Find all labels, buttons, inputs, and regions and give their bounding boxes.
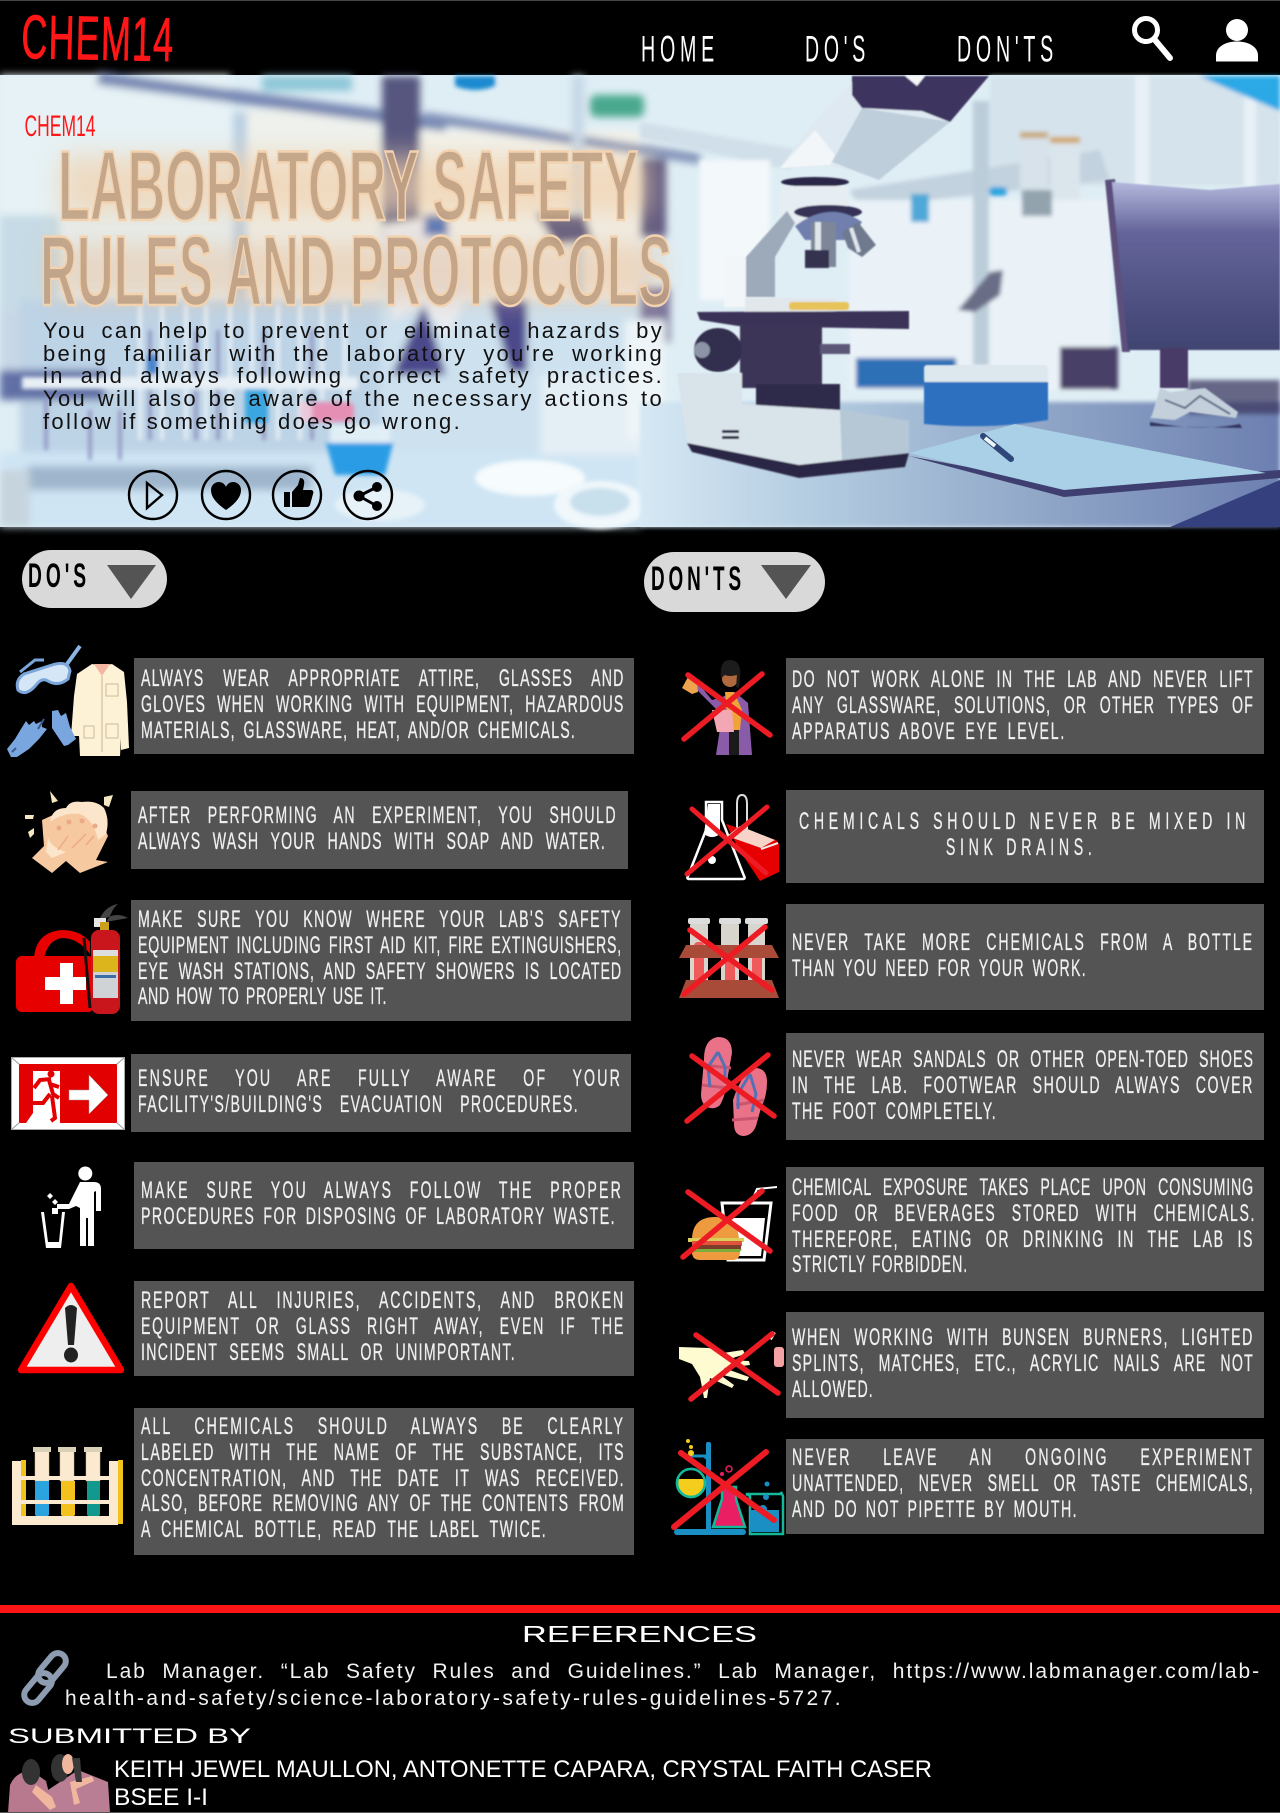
icon: user — [1216, 19, 1258, 62]
hero small brand label: CHEM14 — [24, 110, 96, 143]
text block: APPARATUS ABOVE EYE LEVEL. — [792, 718, 1066, 745]
text block: THEREFORE, EATING OR DRINKING IN THE LAB IS — [792, 1226, 1254, 1253]
submitter names — [114, 1757, 934, 1811]
text block: MAKE SURE YOU KNOW WHERE YOUR LAB'S SAFETY — [138, 906, 622, 933]
panel: do 3 — [131, 900, 631, 1021]
text block — [140, 1413, 625, 1543]
red cross — [684, 674, 770, 739]
text block: EYE WASH STATIONS, AND SAFETY SHOWERS IS LOCATED — [138, 958, 622, 985]
text block — [138, 802, 617, 855]
text block — [792, 1444, 1254, 1523]
panel: do 2 — [131, 791, 628, 869]
text block: SPLINTS, MATCHES, ETC., ACRYLIC NAILS ARE NOT — [792, 1350, 1254, 1377]
icon: thumbs up — [273, 471, 321, 519]
text block: NEVER LEAVE AN ONGOING EXPERIMENT — [792, 1444, 1254, 1471]
text block: AND DO NOT PIPETTE BY MOUTH. — [792, 1496, 1078, 1523]
navigation — [641, 28, 1058, 70]
dropdown: do's — [22, 550, 167, 608]
panel: don't 6 — [786, 1312, 1264, 1418]
reference text — [65, 1660, 1261, 1710]
icon: science glassware crossed out — [671, 1439, 784, 1536]
navigation: DO'S — [805, 28, 870, 70]
text block: LABELED WITH THE NAME OF THE SUBSTANCE, ITS — [141, 1439, 625, 1466]
icon: students group — [8, 1753, 110, 1813]
icon: flask and box crossed out — [684, 794, 779, 881]
text block — [792, 666, 1254, 745]
panel: don't 3 — [786, 904, 1264, 1010]
intro paragraph: in and always following correct safety practices. — [43, 363, 664, 388]
hero photo: laboratory with microscope — [0, 66, 1280, 534]
text block — [141, 1287, 625, 1366]
text block: DO NOT WORK ALONE IN THE LAB AND NEVER LIFT — [792, 666, 1254, 693]
text block: CHEMICALS SHOULD NEVER BE MIXED IN — [799, 808, 1250, 835]
icon: play — [129, 471, 177, 519]
hero title with glow — [40, 130, 672, 326]
icon: first aid kit and fire extinguisher — [16, 904, 128, 1014]
text block — [141, 1177, 623, 1230]
text block: EQUIPMENT INCLUDING FIRST AID KIT, FIRE EXTINGUISHERS, — [138, 932, 622, 959]
panel: do 7 — [134, 1408, 634, 1555]
panel: don't 7 — [786, 1439, 1264, 1534]
text block: ALLOWED. — [792, 1376, 874, 1403]
text block: MAKE SURE YOU ALWAYS FOLLOW THE PROPER — [141, 1177, 623, 1204]
dropdown: do's: DO'S — [28, 557, 90, 595]
submitted by heading: SUBMITTED BY — [8, 1725, 251, 1748]
text block: IN THE LAB. FOOTWEAR SHOULD ALWAYS COVER — [792, 1072, 1254, 1099]
hero action icons — [128, 470, 394, 520]
icon: link — [21, 1650, 69, 1706]
text block: FACILITY'S/BUILDING'S EVACUATION PROCEDURES. — [138, 1091, 578, 1118]
icon: washing hands — [25, 791, 113, 873]
icon: test tubes crossed out — [679, 918, 779, 998]
goggles on table — [1150, 388, 1242, 428]
bottom edge — [0, 1812, 1280, 1813]
logo: CHEM14 — [21, 3, 175, 75]
text block — [138, 1065, 621, 1118]
intro paragraph: being familiar with the laboratory you're working — [43, 341, 664, 366]
text block: PROCEDURES FOR DISPOSING OF LABORATORY WASTE. — [141, 1203, 616, 1230]
icon: share — [344, 471, 392, 519]
panel: do 1 — [134, 658, 634, 754]
icon: heart — [202, 471, 250, 519]
text block: CHEMICAL EXPOSURE TAKES PLACE UPON CONSUMING — [792, 1174, 1254, 1201]
text block: EQUIPMENT OR GLASS RIGHT AWAY, EVEN IF THE — [141, 1313, 625, 1340]
text block: THAN YOU NEED FOR YOUR WORK. — [792, 955, 1087, 982]
panel: do 4 — [131, 1054, 631, 1132]
red divider — [0, 1605, 1280, 1613]
red cross — [684, 927, 772, 994]
text block — [792, 1174, 1256, 1278]
intro paragraph: You can help to prevent or eliminate hazards by — [43, 318, 664, 343]
panel: don't 4 — [786, 1033, 1264, 1140]
text block: WHEN WORKING WITH BUNSEN BURNERS, LIGHTED — [792, 1324, 1254, 1351]
dropdown: don'ts — [644, 552, 825, 612]
hero title with glow: RULES AND PROTOCOLS — [40, 215, 672, 326]
text block: MATERIALS, GLASSWARE, HEAT, AND/OR CHEMICALS. — [141, 717, 576, 744]
references heading: REFERENCES — [522, 1621, 757, 1647]
intro paragraph — [43, 318, 664, 434]
icon: warning triangle — [18, 1282, 124, 1374]
right background — [990, 76, 1280, 186]
text block: INCIDENT SEEMS SMALL OR UNIMPORTANT. — [141, 1339, 516, 1366]
text block: STRICTLY FORBIDDEN. — [792, 1251, 968, 1278]
text block: ALL CHEMICALS SHOULD ALWAYS BE CLEARLY — [141, 1413, 625, 1440]
icon: exit sign — [11, 1057, 125, 1130]
monitor — [1105, 179, 1280, 414]
icon: test tube rack — [12, 1447, 123, 1525]
red cross — [687, 1055, 774, 1121]
intro paragraph: You will also be aware of the necessary actions to — [43, 386, 664, 411]
text block: REPORT ALL INJURIES, ACCIDENTS, AND BROKEN — [141, 1287, 625, 1314]
submitter names: KEITH JEWEL MAULLON, ANTONETTE CAPARA, CRYSTAL FAITH CASER — [114, 1756, 932, 1783]
panel: don't 2 — [786, 790, 1264, 883]
icon: person disposing waste — [41, 1166, 101, 1248]
text block: NEVER TAKE MORE CHEMICALS FROM A BOTTLE — [792, 929, 1254, 956]
text block: ANY GLASSWARE, SOLUTIONS, OR OTHER TYPES OF — [792, 692, 1254, 719]
text block — [792, 1324, 1254, 1403]
icon: goggles, lab coat, gloves — [7, 644, 129, 757]
reference text: health-and-safety/science-laboratory-safety-rules-guidelines-5727. — [65, 1686, 843, 1710]
red cross — [683, 1191, 770, 1257]
text block: UNATTENDED, NEVER SMELL OR TASTE CHEMICALS, — [792, 1470, 1254, 1497]
icon: sandals crossed out — [684, 1037, 777, 1136]
hero title with glow: LABORATORY SAFETY — [58, 130, 638, 241]
table top — [640, 402, 1280, 527]
text block: AFTER PERFORMING AN EXPERIMENT, YOU SHOULD — [138, 802, 617, 829]
test tube rack — [22, 304, 358, 460]
icon: person with flask crossed out — [681, 660, 773, 755]
navigation: HOME — [641, 28, 719, 70]
navigation: DON'TS — [957, 28, 1058, 70]
red cross — [687, 807, 767, 874]
text block — [799, 808, 1250, 861]
text block — [140, 665, 624, 744]
text block: ALSO, BEFORE REMOVING ANY OF THE CONTENTS FROM — [141, 1490, 625, 1517]
text block — [138, 906, 622, 1010]
submitter names: BSEE I-I — [114, 1784, 208, 1811]
panel: don't 5 — [786, 1167, 1264, 1291]
text block: SINK DRAINS. — [946, 834, 1096, 861]
text block: NEVER WEAR SANDALS OR OTHER OPEN-TOED SHOES — [792, 1046, 1254, 1073]
text block: GLOVES WHEN WORKING WITH EQUIPMENT, HAZARDOUS — [141, 691, 624, 718]
reference text: Lab Manager. “Lab Safety Rules and Guidelines.” Lab Manager, https://www.labmanager.com/lab- — [106, 1660, 1261, 1683]
text block: ALWAYS WASH YOUR HANDS WITH SOAP AND WATER. — [138, 828, 606, 855]
clipboard and pen — [909, 424, 1280, 497]
dropdown: don'ts: DON'TS — [651, 560, 745, 598]
panel: don't 1 — [786, 658, 1264, 754]
text block: ALWAYS WEAR APPROPRIATE ATTIRE, GLASSES AND — [141, 665, 624, 692]
text block: CONCENTRATION, AND THE DATE IT WAS RECEIVED. — [141, 1465, 625, 1492]
text block: FOOD OR BEVERAGES STORED WITH CHEMICALS. — [792, 1200, 1256, 1227]
intro paragraph: follow if something does go wrong. — [43, 409, 462, 434]
text block — [792, 1046, 1254, 1125]
red cross — [674, 1452, 774, 1527]
panel: do 5 — [134, 1162, 634, 1249]
red cross — [691, 1334, 778, 1399]
icon: burger and drink crossed out — [680, 1186, 778, 1262]
panel: do 6 — [134, 1281, 634, 1376]
blue container — [924, 365, 1048, 426]
text block: THE FOOT COMPLETELY. — [792, 1098, 997, 1125]
text block: A CHEMICAL BOTTLE, READ THE LABEL TWICE. — [141, 1516, 547, 1543]
text block — [792, 929, 1254, 982]
icon: hand with acrylic nails crossed out — [679, 1331, 784, 1402]
blurred lab background — [0, 75, 700, 527]
icon: search — [1134, 18, 1170, 58]
text block: AND HOW TO PROPERLY USE IT. — [138, 983, 387, 1010]
microscope — [677, 76, 989, 478]
text block: ENSURE YOU ARE FULLY AWARE OF YOUR — [138, 1065, 621, 1092]
header bar — [0, 0, 1280, 75]
